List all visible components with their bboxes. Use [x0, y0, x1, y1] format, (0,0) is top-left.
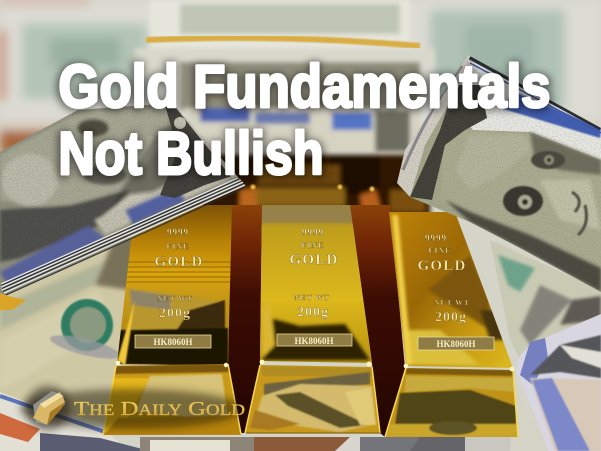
dark area above gold bars [170, 155, 430, 240]
left bar stamps [135, 227, 211, 348]
title shadow: Not Bullish [57, 121, 325, 188]
logo wordmark: THE D AILY G OLD [74, 398, 245, 420]
right bar stamps [418, 233, 494, 350]
gold bar: centre [245, 205, 380, 433]
right bar stamps: NET WT [434, 298, 470, 307]
portrait eyes [503, 151, 586, 235]
logo: The Daily Gold [20, 386, 245, 430]
centre bar stamps: NET WT [294, 293, 330, 302]
rolled dollar: lower right [516, 314, 601, 451]
rolled dollar: left [0, 100, 250, 310]
left bar stamps: NET WT [157, 294, 193, 303]
centre bar stamps: 9999 [302, 227, 324, 237]
right bar stamps: 9999 [425, 233, 447, 243]
blurred money stack behind title [135, 0, 435, 156]
title text [58, 53, 550, 187]
money on table, lower background [0, 225, 601, 451]
right bar stamps: GOLD [418, 258, 466, 274]
yellow rubber band [146, 38, 420, 46]
gold bar: left [103, 205, 241, 435]
centre bar stamps: FINE [301, 241, 325, 250]
dark red gaps between gold bars [228, 205, 405, 437]
right bar stamps: HK8060H [436, 339, 476, 349]
title shadow [57, 54, 552, 188]
left bar stamps: FINE [166, 242, 190, 251]
title text: Not Bullish [58, 120, 324, 187]
icon: gold bar [33, 391, 65, 425]
green seal on banknote [48, 299, 122, 363]
left bar stamps: 200g [159, 306, 191, 321]
right bar stamps: 200g [435, 310, 467, 325]
collar of left roll [160, 103, 232, 198]
gold bar: right [385, 212, 518, 438]
centre bar stamps: 200g [297, 305, 329, 320]
left roll paper edge [1, 178, 245, 293]
right bar stamps: FINE [428, 246, 452, 255]
collar and cut end of right roll [410, 85, 487, 200]
left bar stamps: 9999 [167, 227, 189, 237]
left bar stamps: GOLD [155, 254, 203, 270]
centre bar stamps [277, 227, 352, 346]
left bar stamps: HK8060H [153, 337, 193, 347]
centre bar stamps: HK8060H [294, 336, 334, 346]
title [57, 53, 552, 188]
rolled dollar: right [390, 50, 601, 300]
centre bar stamps: GOLD [290, 252, 338, 268]
title shadow: Gold Fundamentals [57, 54, 552, 121]
